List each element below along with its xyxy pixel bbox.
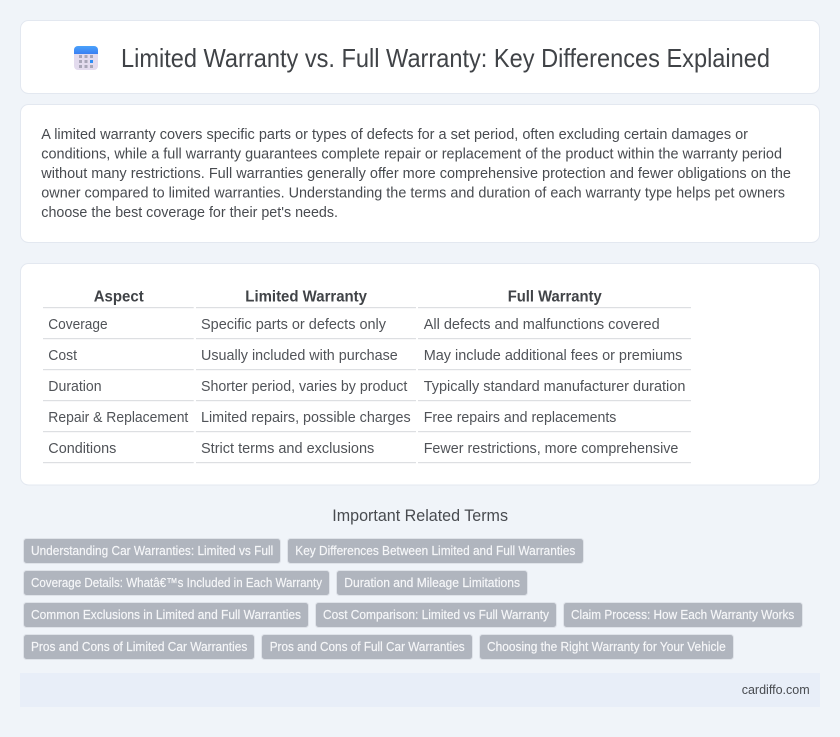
table row: duration: Shorter period, varies by product xyxy=(201,379,407,395)
table row: coverage: Specific parts or defects only xyxy=(201,317,387,333)
icon: calendar xyxy=(74,46,98,70)
table row: conditions xyxy=(43,441,691,463)
table row: conditions: Conditions xyxy=(48,441,116,457)
panel: introduction text: owner compared to limited warranties. Understanding the terms and duration of each warranty type helps pet owners xyxy=(41,186,785,202)
tag xyxy=(480,634,734,660)
related terms tags xyxy=(24,538,802,660)
tag: Coverage Details: Whatâ€™s Included in Each Warranty xyxy=(31,575,322,590)
panel: introduction text xyxy=(20,104,820,242)
table row: repair and replacement: Repair & Replacement xyxy=(48,410,188,426)
tag: Claim Process: How Each Warranty Works xyxy=(571,607,795,622)
tag: Pros and Cons of Limited Car Warranties xyxy=(31,639,248,654)
table row: cost: Cost xyxy=(48,348,77,364)
tag: Pros and Cons of Full Car Warranties xyxy=(270,639,465,654)
table header row: Limited Warranty xyxy=(245,288,367,306)
table header row xyxy=(43,288,691,308)
tag xyxy=(288,538,584,564)
table row: conditions: Fewer restrictions, more comprehensive xyxy=(424,441,678,457)
table row: conditions: Strict terms and exclusions xyxy=(201,441,374,457)
tag: Understanding Car Warranties: Limited vs Full xyxy=(31,543,273,558)
panel: introduction text: without many restrictions. Full warranties generally offer more comprehensive protection and fewer obligations on the xyxy=(40,166,791,182)
tag xyxy=(336,570,528,596)
footer: cardiffo.com xyxy=(742,682,810,697)
tag xyxy=(262,634,472,660)
tag: Common Exclusions in Limited and Full Warranties xyxy=(31,607,301,622)
panel: header xyxy=(20,20,820,94)
table row: cost: Usually included with purchase xyxy=(201,348,398,364)
footer xyxy=(20,673,820,707)
tag xyxy=(24,570,330,596)
title: Limited Warranty vs. Full Warranty: Key Differences Explained xyxy=(121,45,770,73)
panel: comparison table xyxy=(20,264,820,485)
tag xyxy=(24,634,254,660)
table row: coverage xyxy=(43,317,691,339)
tag: Cost Comparison: Limited vs Full Warranty xyxy=(323,607,549,622)
panel: introduction text: A limited warranty covers specific parts or types of defects for a set period, often excluding certain damages or xyxy=(41,127,748,143)
table row: duration xyxy=(43,379,691,401)
table header row: Aspect xyxy=(94,288,144,306)
table row: duration: Typically standard manufacturer duration xyxy=(424,379,685,395)
heading: important related terms: Important Related Terms xyxy=(332,507,508,525)
table row: coverage: Coverage xyxy=(48,317,108,333)
tag xyxy=(24,538,280,564)
tag: Key Differences Between Limited and Full Warranties xyxy=(295,543,576,558)
panel: introduction text: choose the best coverage for their pet's needs. xyxy=(41,205,338,221)
tag: Choosing the Right Warranty for Your Vehicle xyxy=(487,639,726,654)
table row: repair and replacement: Limited repairs, possible charges xyxy=(201,410,411,426)
tag xyxy=(316,602,556,628)
table row: repair and replacement xyxy=(43,410,691,432)
table row: duration: Duration xyxy=(48,379,102,395)
tag xyxy=(564,602,802,628)
table row: repair and replacement: Free repairs and replacements xyxy=(424,410,616,426)
table row: cost xyxy=(43,348,691,370)
table header row: Full Warranty xyxy=(508,288,602,306)
tag: Duration and Mileage Limitations xyxy=(344,575,520,590)
table row: cost: May include additional fees or premiums xyxy=(424,348,682,364)
table row: coverage: All defects and malfunctions covered xyxy=(424,317,660,333)
panel: introduction text: conditions, while a full warranty guarantees complete repair or replacement of the product within the warranty period xyxy=(41,146,782,162)
tag xyxy=(24,602,308,628)
